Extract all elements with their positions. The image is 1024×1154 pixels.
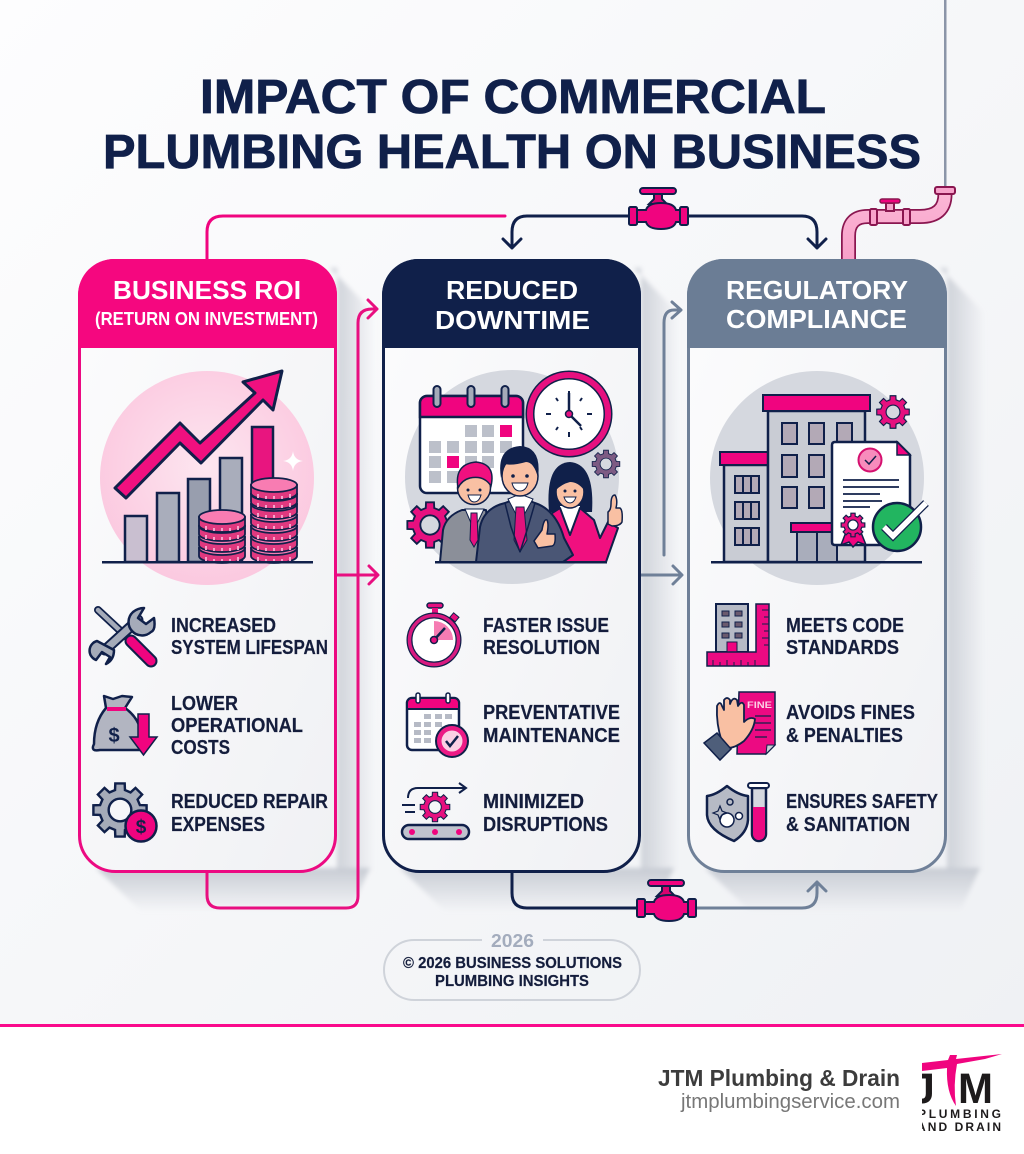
text: meets code standards: STANDARDS — [786, 637, 899, 659]
text: lower operational costs: COSTS — [171, 737, 230, 759]
icon: pink elbow pipe with tap — [848, 187, 955, 260]
heading — [95, 275, 318, 329]
man with pink hair — [440, 462, 492, 562]
card body — [384, 260, 640, 872]
text: ensures safety and sanitation: & SANITATION — [786, 814, 910, 836]
icon: wrench and screwdriver — [90, 608, 155, 664]
logo: J — [911, 1065, 935, 1113]
text: avoids fines and penalties — [786, 702, 915, 747]
logo: PLUMBING — [918, 1107, 1001, 1121]
icon: bottom valve — [637, 880, 696, 921]
heading — [435, 275, 590, 335]
title — [103, 71, 921, 179]
illustration: calendar, clock and team — [405, 370, 622, 584]
title: IMPACT OF COMMERCIAL — [200, 71, 826, 124]
panel: reduced downtime — [382, 259, 641, 872]
icon: hand stopping fine notice: FINE — [747, 700, 772, 711]
text: minimized disruptions: MINIMIZED — [483, 791, 584, 813]
text: ensures safety and sanitation: ENSURES SAFETY — [786, 791, 939, 813]
icon: conveyor with gear — [402, 783, 469, 839]
copyright pill: 2026 — [491, 931, 534, 951]
heading: (RETURN ON INVESTMENT) — [95, 309, 318, 329]
heading: BUSINESS ROI — [113, 275, 301, 305]
text: faster issue resolution: RESOLUTION — [483, 637, 600, 659]
connector: ROI top to Reduced Downtime — [207, 216, 630, 259]
text: preventative maintenance — [483, 702, 620, 747]
icon: shield and test tube — [707, 783, 769, 841]
man in dark suit — [476, 446, 573, 562]
card header — [78, 259, 337, 348]
heading: COMPLIANCE — [726, 304, 907, 334]
text: avoids fines and penalties: & PENALTIES — [786, 725, 903, 747]
icon: calendar with check — [407, 693, 468, 757]
text: faster issue resolution — [483, 615, 609, 659]
text: preventative maintenance: MAINTENANCE — [483, 725, 620, 747]
copyright pill: PLUMBING INSIGHTS — [435, 973, 589, 990]
woman — [547, 462, 622, 562]
title: PLUMBING HEALTH ON BUSINESS — [103, 126, 921, 179]
brand name: JTM Plumbing & Drain — [658, 1065, 900, 1091]
text: ensures safety and sanitation — [786, 791, 939, 836]
brand name — [658, 1065, 900, 1113]
heading — [726, 275, 908, 334]
text: increased system lifespan: SYSTEM LIFESPAN — [171, 637, 328, 659]
copyright pill: © 2026 BUSINESS SOLUTIONS — [403, 955, 622, 972]
card body — [688, 260, 946, 872]
heading: REDUCED — [446, 275, 578, 305]
card header — [382, 259, 641, 348]
logo — [922, 1054, 1002, 1131]
panel: regulatory compliance — [687, 259, 947, 872]
footer band — [0, 1024, 1024, 1154]
connector: Reduced Downtime to Regulatory Compliance side — [641, 302, 682, 584]
heading: DOWNTIME — [435, 305, 590, 335]
text: increased system lifespan — [171, 615, 328, 659]
icon: money bag with down arrow — [93, 696, 157, 755]
illustration: buildings and certificate — [710, 371, 926, 585]
text: preventative maintenance: PREVENTATIVE — [483, 702, 620, 724]
icon: stopwatch — [410, 603, 459, 664]
logo: AND DRAIN — [917, 1120, 1001, 1134]
connector: ROI bottom to Reduced Downtime top — [207, 300, 378, 908]
text: lower operational costs: OPERATIONAL — [171, 715, 303, 737]
text: increased system lifespan: INCREASED — [171, 615, 276, 637]
logo: M — [958, 1065, 993, 1113]
heading: REGULATORY — [726, 275, 908, 305]
text: meets code standards: MEETS CODE — [786, 615, 904, 637]
text: minimized disruptions: DISRUPTIONS — [483, 814, 608, 836]
icon: money bag with down arrow: $ — [108, 725, 120, 747]
text: meets code standards — [786, 615, 904, 659]
icon: building with ruler — [707, 604, 769, 666]
text: faster issue resolution: FASTER ISSUE — [483, 615, 609, 637]
brand name: jtmplumbingservice.com — [680, 1091, 900, 1113]
text: reduced repair expenses — [171, 791, 328, 836]
card header — [687, 259, 947, 348]
illustration: growth chart with coins — [100, 371, 314, 585]
text: minimized disruptions — [483, 791, 608, 836]
card body — [80, 260, 336, 872]
text: avoids fines and penalties: AVOIDS FINES — [786, 702, 915, 724]
vertical grey supply pipe — [944, 0, 946, 187]
text: lower operational costs — [171, 693, 303, 759]
text: reduced repair expenses: EXPENSES — [171, 814, 265, 836]
text: lower operational costs: LOWER — [171, 693, 238, 715]
copyright pill — [384, 931, 640, 1000]
icon: hand stopping fine notice — [704, 692, 775, 760]
connector: bottom Reduced Downtime to Regulatory Compliance — [512, 873, 826, 908]
icon: top valve — [629, 188, 688, 229]
icon: gear with dollar — [93, 783, 156, 842]
connector: top valve to Regulatory Compliance — [688, 216, 826, 248]
card drop shadows — [96, 268, 985, 912]
text: reduced repair expenses: REDUCED REPAIR — [171, 791, 328, 813]
icon: gear with dollar: $ — [136, 817, 147, 838]
panel: business ROI — [78, 259, 337, 872]
